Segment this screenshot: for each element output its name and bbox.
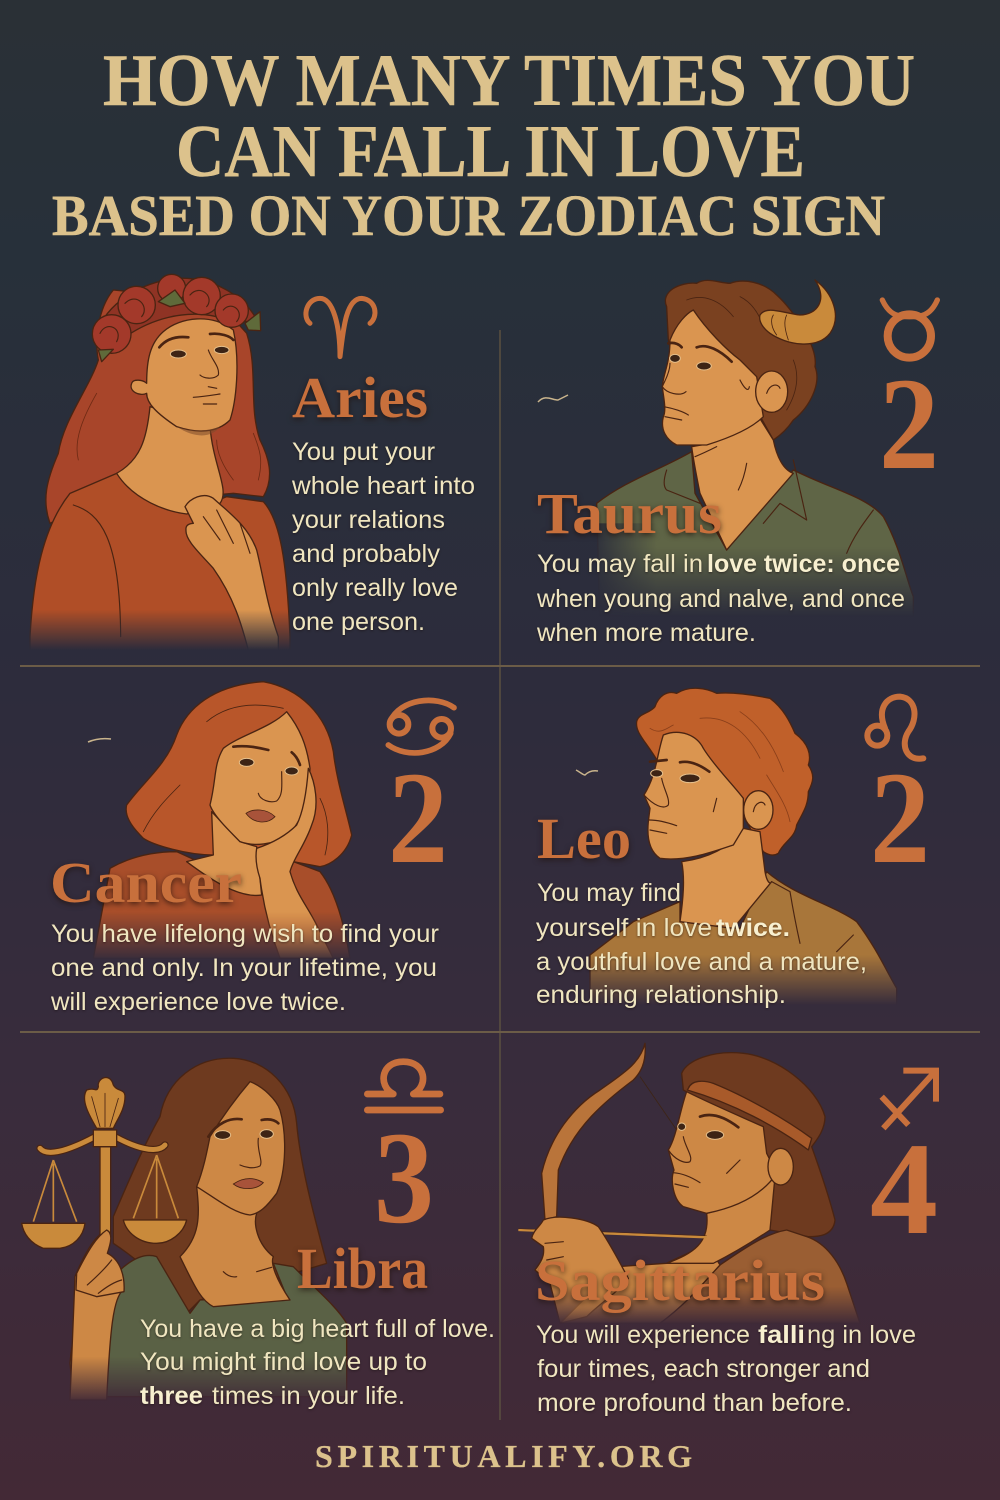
text block: when young and nalve, and once — [536, 585, 905, 613]
text block: more profound than before. — [537, 1389, 852, 1417]
text block: twice. — [716, 914, 790, 942]
panel: Sagittarius — [518, 1043, 938, 1417]
heading: Aries — [292, 365, 428, 430]
heading: Sagittarius — [535, 1248, 825, 1313]
text block: whole heart into — [291, 472, 475, 500]
text block: You may fall in — [537, 550, 703, 578]
text block: You will experience — [536, 1321, 750, 1349]
illustration: man with curly hair — [590, 688, 897, 1015]
text block — [536, 550, 905, 647]
panel: Leo — [536, 688, 930, 1015]
heading: Libra — [297, 1236, 428, 1301]
text block: You might find love up to — [140, 1348, 427, 1376]
icon: Aries symbol — [306, 298, 375, 357]
text block: You put your — [292, 438, 435, 466]
icon: bird — [538, 395, 568, 402]
text block: love twice: once — [707, 550, 900, 578]
title: BASED ON YOUR ZODIAC SIGN — [52, 183, 885, 248]
footer: SPIRITUALIFY.ORG — [315, 1438, 692, 1474]
text block: You may find — [537, 879, 681, 907]
text block: falli — [758, 1321, 805, 1349]
icon: Leo symbol — [867, 697, 923, 759]
illustration: woman with rose crown — [30, 274, 290, 657]
panel: Cancer — [50, 682, 454, 1016]
illustration: man with horn — [597, 280, 913, 627]
icon: bird — [88, 739, 111, 742]
number: 2 — [879, 350, 939, 497]
icon: scales — [22, 1077, 187, 1248]
number: 4 — [870, 1115, 938, 1262]
heading: Cancer — [50, 850, 242, 915]
text block: You have lifelong wish to find your — [51, 920, 439, 948]
number: 3 — [374, 1104, 434, 1251]
title: CAN FALL IN LOVE — [176, 111, 805, 193]
number: 2 — [388, 744, 448, 891]
panel: Aries — [30, 274, 475, 657]
text block: four times, each stronger and — [537, 1355, 870, 1383]
icon: Cancer symbol — [388, 700, 454, 753]
icon: Libra symbol — [367, 1062, 441, 1110]
text block — [536, 1321, 916, 1417]
text block — [536, 879, 867, 1009]
text block: ng in love — [807, 1321, 916, 1349]
text block: your relations — [292, 506, 445, 534]
number: 2 — [870, 744, 930, 891]
text block — [140, 1315, 495, 1410]
illustration: archer with bow — [518, 1043, 860, 1323]
text block: one person. — [292, 608, 425, 636]
icon: horn — [760, 280, 835, 344]
panel: Taurus — [536, 280, 939, 647]
heading: Leo — [537, 806, 631, 871]
text block: when more mature. — [536, 619, 756, 647]
text block: one and only. In your lifetime, you — [51, 954, 437, 982]
text block: yourself in love — [536, 914, 712, 942]
text block — [50, 920, 439, 1016]
text block: and probably — [292, 540, 441, 568]
icon: bird — [576, 770, 598, 775]
illustration: woman holding scales — [22, 1058, 347, 1400]
title — [52, 40, 915, 248]
text block: You have a big heart full of love. — [140, 1315, 495, 1343]
title: HOW MANY TIMES YOU — [103, 40, 915, 122]
text block: a youthful love and a mature, — [536, 948, 867, 976]
text block: only really love — [292, 574, 458, 602]
illustration: worried woman — [93, 682, 352, 958]
panel: Libra — [22, 1058, 495, 1410]
text block: three — [140, 1382, 203, 1410]
heading: Taurus — [537, 481, 722, 546]
icon: Sagittarius symbol — [882, 1071, 936, 1128]
text block: will experience love twice. — [50, 988, 346, 1016]
text block: times in your life. — [212, 1382, 405, 1410]
text block: enduring relationship. — [536, 981, 786, 1009]
icon: Taurus symbol — [882, 300, 937, 358]
text block — [291, 438, 475, 636]
